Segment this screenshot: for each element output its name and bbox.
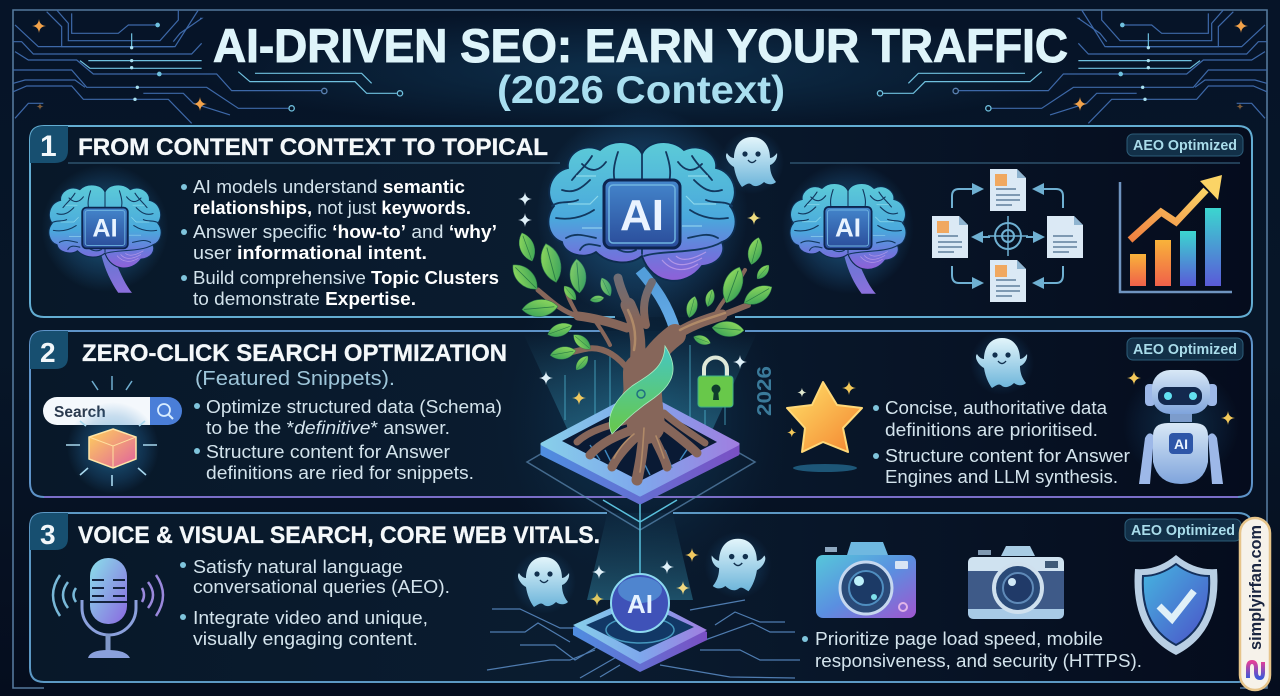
icon: glowing cube — [66, 402, 159, 494]
circuit decoration: top right — [877, 10, 1267, 123]
text: panel 2 right bullets — [873, 397, 1130, 487]
badge: AEO optimized 1: AEO Optimized — [1133, 138, 1237, 154]
brain stem — [640, 270, 675, 330]
icon: robot — [1123, 367, 1239, 484]
panel 1: from content context to topical — [30, 126, 1243, 309]
main AI brain: AI — [620, 191, 664, 240]
text: panel 3 left bullets: visually engaging content. — [193, 628, 418, 649]
orb light beam — [587, 510, 693, 600]
centre glow — [490, 250, 790, 590]
icon: microphone — [53, 558, 163, 658]
AI orb — [611, 574, 669, 632]
AI orb: AI — [627, 589, 653, 619]
badge: AEO optimized 1 — [1127, 134, 1243, 156]
text: panel 1 bullets: user informational intent. — [193, 242, 427, 263]
text: panel 1 bullets: Build comprehensive Topic Clusters — [193, 267, 499, 288]
panel fills — [30, 126, 1252, 682]
padlock — [698, 358, 733, 407]
text: panel 2 left bullets: to be the *definitive* answer. — [206, 417, 450, 438]
central illustration: AI brain tree — [507, 108, 784, 530]
panel 2: zero-click search optimization — [30, 331, 1243, 494]
icon: AI brain left — [41, 164, 169, 293]
tree branches — [538, 270, 748, 400]
sparkles around orb — [590, 548, 699, 606]
sparkles around tree — [518, 192, 761, 405]
chart: rising bars with arrow — [1120, 175, 1232, 292]
watermark: simplyirfan.com: simplyirfan.com — [1246, 525, 1265, 650]
text: panel 3 left bullets: Satisfy natural language — [193, 556, 403, 577]
tree trunk and roots — [577, 372, 705, 480]
tree leaves — [507, 230, 776, 373]
heading 1: FROM CONTENT CONTEXT TO TOPICAL — [78, 134, 548, 161]
icon: search bar — [43, 376, 182, 425]
text: panel 2 left bullets: Structure content for Answer — [206, 441, 450, 462]
light beams above tree platform — [523, 333, 757, 435]
badge: AEO optimized 3: AEO Optimized — [1131, 523, 1235, 539]
tree platform — [527, 392, 755, 530]
number tab 3 — [30, 513, 68, 550]
badge: AEO optimized 2: AEO Optimized — [1133, 342, 1237, 358]
icon: security shield — [1135, 555, 1217, 655]
icon: ghost top centre — [720, 130, 784, 194]
watermark: simplyirfan.com — [1240, 518, 1270, 690]
connecting line — [603, 500, 677, 575]
icon: gold star — [787, 381, 862, 472]
panel borders — [30, 126, 1252, 682]
title: (2026 Context) — [497, 69, 785, 112]
text: panel 2 right bullets: definitions are prioritised. — [885, 419, 1098, 440]
icon: ghost right — [704, 531, 772, 599]
number tab 2: 2 — [40, 337, 56, 368]
icon: AI brain right: AI — [835, 213, 861, 243]
header glow — [200, 10, 1080, 130]
lower centre illustration: AI orb platform — [487, 500, 800, 678]
text: panel 2 right bullets: Engines and LLM synthesis. — [885, 466, 1118, 487]
text: panel 3 right bullet: Prioritize page load speed, mobile — [815, 628, 1103, 649]
text: panel 1 bullets: relationships, not just keywords. — [193, 197, 471, 218]
text: panel 2 right bullets: Concise, authoritative data — [885, 397, 1108, 418]
text: panel 1 bullets: AI models understand semantic — [193, 176, 465, 197]
text: panel 2 left bullets: Optimize structured data (Schema) — [206, 396, 502, 417]
title: AI-DRIVEN SEO: EARN YOUR TRAFFIC — [213, 19, 1068, 72]
badge: AEO optimized 3 — [1125, 519, 1241, 541]
text: panel 1 bullets: Answer specific ‘how-to’ and ‘why’ — [193, 221, 497, 242]
icon: robot: AI — [1174, 436, 1188, 452]
text: panel 1 bullets — [181, 176, 499, 309]
sparkle: top corners — [32, 19, 1248, 111]
panel 3: voice and visual search, core web vitals — [30, 513, 1241, 671]
icon: ghost left — [512, 550, 576, 614]
number tab 1: 1 — [40, 130, 57, 163]
year label: 2026: 2026 — [754, 366, 776, 416]
text: panel 3 right bullet — [802, 628, 1142, 671]
text: panel 3 right bullet: responsiveness, and security (HTTPS). — [815, 650, 1142, 671]
circuit traces — [487, 600, 800, 678]
text: panel 2 left bullets: definitions are ried for snippets. — [206, 462, 474, 483]
text: panel 1 bullets: to demonstrate Expertise. — [193, 288, 416, 309]
icon: blue camera — [816, 542, 916, 618]
icon: grey camera — [968, 546, 1064, 619]
heading 2: ZERO-CLICK SEARCH OPTMIZATION — [82, 340, 507, 367]
icon: AI brain right — [782, 162, 914, 294]
text: panel 3 left bullets: conversational queries (AEO). — [193, 576, 450, 597]
circuit decoration: top left — [13, 10, 403, 123]
text: panel 3 left bullets — [180, 556, 450, 649]
text: panel 2 left bullets — [194, 396, 502, 483]
number tab 2 — [30, 331, 68, 369]
orb platform — [573, 595, 707, 672]
title — [213, 19, 1068, 112]
icon: topic cluster documents — [932, 169, 1083, 302]
icon: ghost panel 2 — [970, 331, 1034, 395]
icon: AI brain left: AI — [92, 214, 118, 242]
main AI brain — [536, 108, 748, 320]
icon: search bar: Search — [54, 404, 106, 421]
heading 3: VOICE & VISUAL SEARCH, CORE WEB VITALS. — [78, 522, 600, 549]
subheading: featured snippets: (Featured Snippets). — [195, 368, 395, 390]
number tab 3: 3 — [40, 519, 56, 550]
number tab 1 — [30, 126, 68, 163]
green ribbon around trunk — [609, 346, 673, 434]
text: panel 2 right bullets: Structure content for Answer — [885, 445, 1130, 466]
text: panel 3 left bullets: Integrate video and unique, — [193, 607, 428, 628]
badge: AEO optimized 2 — [1127, 338, 1243, 360]
